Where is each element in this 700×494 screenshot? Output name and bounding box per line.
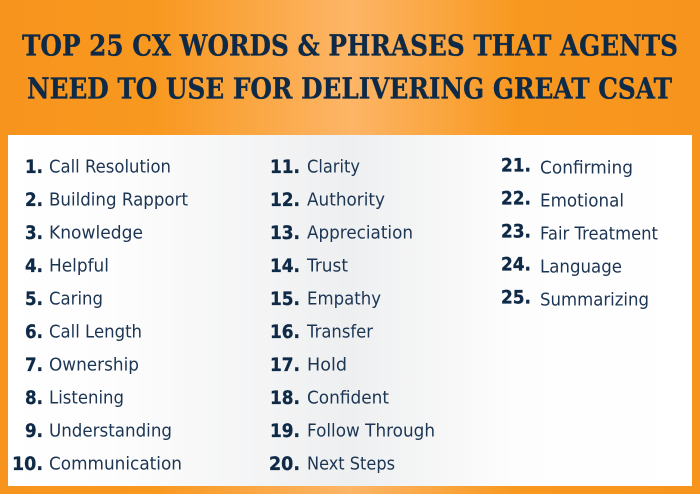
column 2: items 11 to 20: Empathy	[307, 290, 381, 310]
column 2: items 11 to 20: 11.	[270, 156, 300, 178]
column 1: items 1 to 10: 1.	[25, 156, 43, 178]
column 3: items 21 to 25	[501, 154, 658, 310]
column 2: items 11 to 20: Trust	[306, 256, 348, 276]
column 1: items 1 to 10: 9.	[25, 420, 43, 442]
column 3: items 21 to 25: 22.	[501, 188, 531, 210]
column 1: items 1 to 10: 8.	[25, 387, 43, 409]
column 3: items 21 to 25: 25.	[501, 286, 531, 308]
column 2: items 11 to 20: 19.	[270, 420, 300, 442]
column 1: items 1 to 10: 7.	[25, 354, 43, 376]
column 3: items 21 to 25: 21.	[501, 154, 531, 176]
column 2: items 11 to 20: Next Steps	[307, 454, 395, 474]
column 1: items 1 to 10: Caring	[49, 290, 103, 310]
column 3: items 21 to 25: Summarizing	[540, 290, 649, 310]
column 1: items 1 to 10: Call Length	[49, 322, 142, 342]
column 2: items 11 to 20: 17.	[270, 354, 300, 376]
column 2: items 11 to 20: 13.	[270, 222, 300, 244]
column 3: items 21 to 25: 24.	[501, 254, 531, 276]
column 1: items 1 to 10: Call Resolution	[49, 158, 171, 178]
column 1: items 1 to 10: Listening	[49, 388, 124, 408]
column 3: items 21 to 25: Emotional	[540, 192, 624, 212]
column 3: items 21 to 25: Confirming	[540, 158, 633, 178]
column 1: items 1 to 10: Knowledge	[49, 224, 143, 244]
column 1: items 1 to 10: Communication	[49, 454, 182, 474]
column 2: items 11 to 20: 14.	[270, 255, 300, 277]
column 1: items 1 to 10: 5.	[25, 288, 43, 310]
column 2: items 11 to 20: 12.	[270, 189, 300, 211]
column 1: items 1 to 10: Understanding	[49, 422, 172, 442]
column 1: items 1 to 10	[12, 156, 188, 475]
column 3: items 21 to 25: Fair Treatment	[540, 224, 658, 244]
column 1: items 1 to 10: Ownership	[49, 356, 139, 376]
column 2: items 11 to 20: Authority	[307, 190, 385, 210]
column 3: items 21 to 25: 23.	[501, 220, 531, 242]
column 2: items 11 to 20: Follow Through	[307, 422, 435, 442]
column 1: items 1 to 10: 6.	[25, 321, 43, 343]
column 2: items 11 to 20: Appreciation	[307, 224, 413, 244]
column 2: items 11 to 20: 16.	[270, 321, 300, 343]
column 2: items 11 to 20	[269, 156, 435, 475]
column 1: items 1 to 10: 4.	[25, 255, 43, 277]
column 2: items 11 to 20: 15.	[270, 288, 300, 310]
column 3: items 21 to 25: Language	[540, 258, 622, 278]
column 2: items 11 to 20: 18.	[270, 387, 300, 409]
title	[22, 28, 678, 106]
column 2: items 11 to 20: 20.	[269, 453, 300, 475]
column 2: items 11 to 20: Transfer	[306, 322, 374, 342]
column 2: items 11 to 20: Confident	[307, 388, 389, 408]
column 1: items 1 to 10: Building Rapport	[49, 190, 188, 210]
column 1: items 1 to 10: 3.	[25, 222, 43, 244]
panel: word list	[8, 135, 692, 486]
column 1: items 1 to 10: 10.	[12, 453, 43, 475]
column 1: items 1 to 10: Helpful	[49, 256, 109, 276]
column 2: items 11 to 20: Hold	[307, 356, 347, 376]
column 1: items 1 to 10: 2.	[25, 189, 43, 211]
column 2: items 11 to 20: Clarity	[307, 158, 360, 178]
